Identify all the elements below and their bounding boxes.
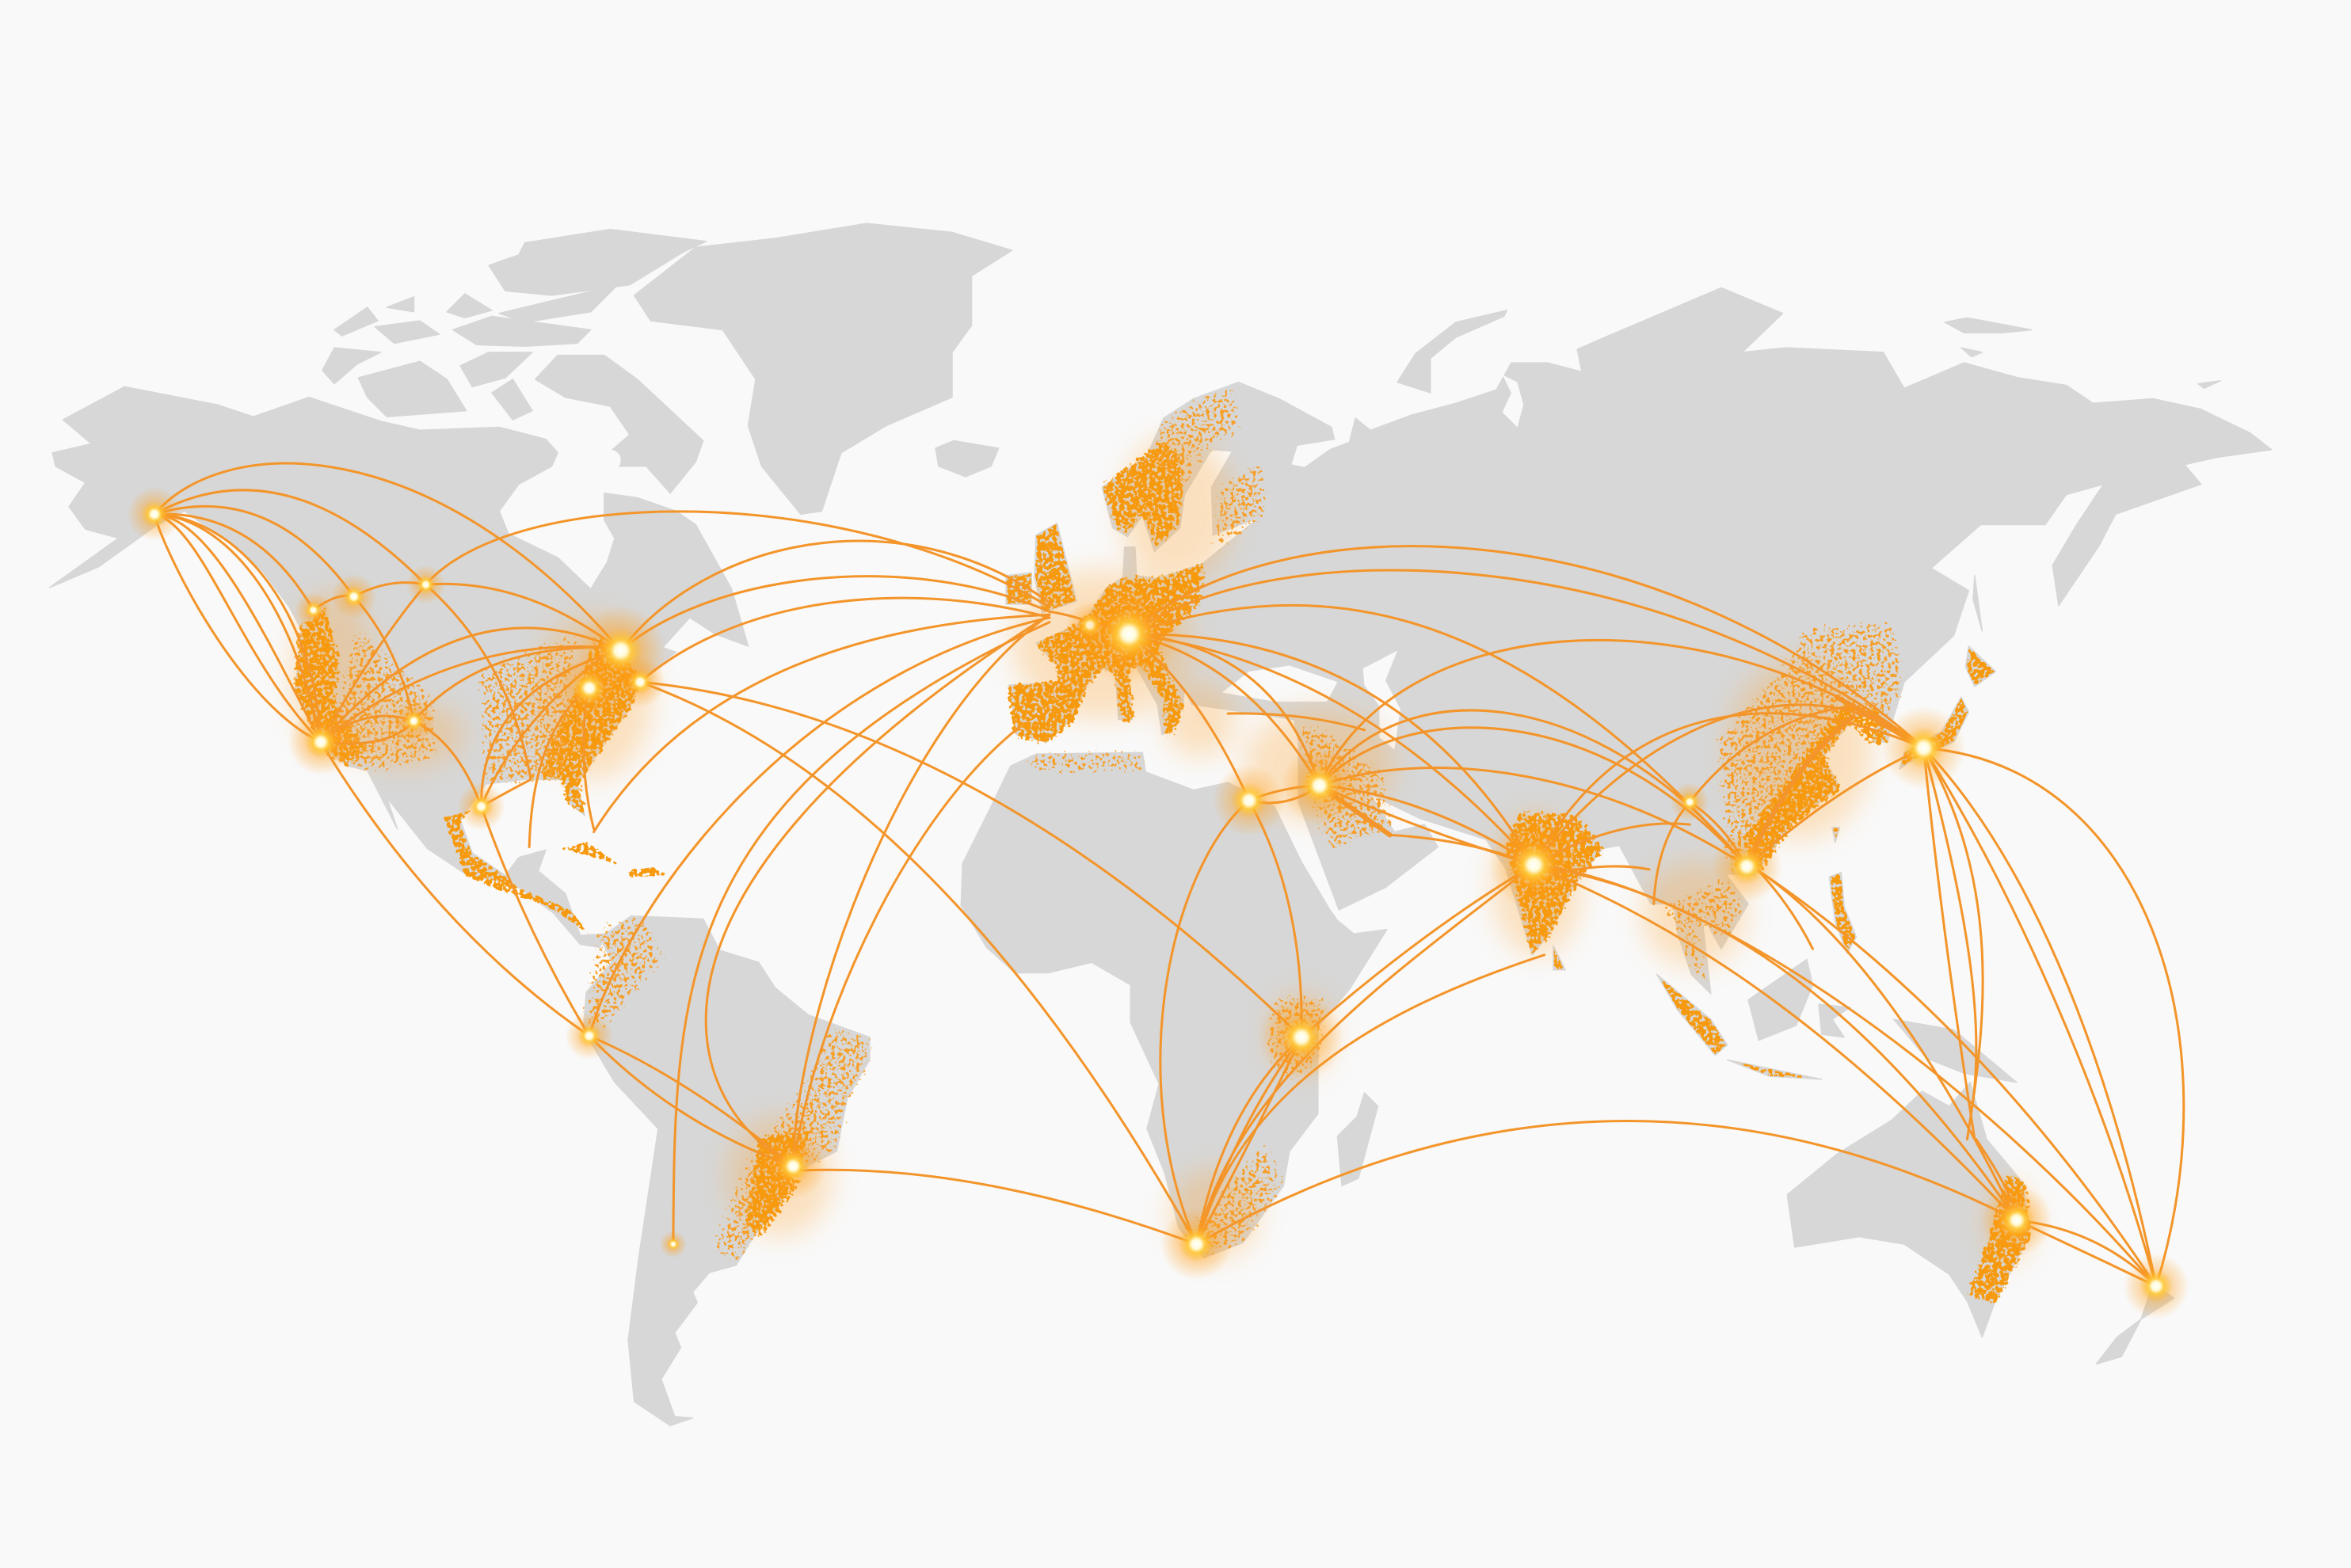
landmass: Madagascar xyxy=(1337,1093,1378,1186)
speckle: US southwest xyxy=(318,615,442,779)
sea: Caspian Sea xyxy=(1363,651,1400,749)
hub: Lima xyxy=(566,1012,613,1060)
landmass: Sri Lanka and Taiwan xyxy=(1553,828,1840,970)
landmass: Siberian islands xyxy=(1945,318,2220,388)
sea: Black Sea xyxy=(1222,665,1337,702)
hub: Auckland xyxy=(2123,1253,2189,1319)
speckle: Southern Africa xyxy=(1172,1132,1293,1267)
landmass: Arctic islands xyxy=(322,230,707,493)
glowing city hubs xyxy=(128,487,2189,1319)
hub: Dubai xyxy=(1280,747,1358,824)
speckle: southern Scandinavia xyxy=(1099,438,1184,552)
arcs: Europe to Asia routes xyxy=(1129,546,1924,866)
city light speckle clusters xyxy=(291,378,2033,1307)
landmass: Iceland xyxy=(935,441,999,477)
hub: Washington xyxy=(615,657,665,707)
landmass: Eurasia xyxy=(1009,287,2272,994)
landmass: North and Central America xyxy=(49,386,749,947)
landmass: Novaya Zemlya xyxy=(1397,310,1507,393)
landmass: Japan and Sakhalin xyxy=(1899,576,1995,769)
speckle: Japan xyxy=(1899,646,1995,769)
inland seas xyxy=(600,375,1523,749)
landmass: Australia xyxy=(1787,1083,2029,1337)
hub: Chile xyxy=(660,1231,687,1258)
speckle: Sao Paulo xyxy=(742,1127,813,1241)
hub: Vancouver xyxy=(295,592,331,628)
speckle: Indonesia xyxy=(1657,974,1822,1079)
hub: Dallas xyxy=(393,700,435,742)
arcs: thick East Asia corridor xyxy=(1320,697,1924,866)
hub: Cape Town xyxy=(1160,1208,1233,1281)
sea: lake and gulf details xyxy=(600,375,1523,470)
hub: Anchorage xyxy=(128,487,181,541)
speckle: North African coast xyxy=(1004,747,1152,779)
land masses xyxy=(49,223,2272,1425)
speckle: East Africa xyxy=(1259,989,1335,1094)
speckle: central United States xyxy=(472,622,585,794)
arcs: North American routes xyxy=(314,583,621,1036)
arcs: Pacific routes xyxy=(1924,748,2184,1286)
hub: Mexico xyxy=(457,782,505,831)
speckle: Brazil xyxy=(705,1019,877,1274)
hub: Chicago xyxy=(556,655,623,721)
hub: Los Angeles xyxy=(288,709,354,775)
speckle: northern Scandinavia and Baltics xyxy=(1140,378,1275,569)
hub: New York xyxy=(576,606,665,695)
hub: Sydney xyxy=(1980,1184,2052,1256)
hub: Cairo xyxy=(1213,764,1285,836)
hub: Kunming xyxy=(1671,782,1709,821)
speckle: dense Europe xyxy=(1004,559,1207,747)
landmass: Philippines xyxy=(1829,873,1856,953)
route arcs xyxy=(154,463,2184,1286)
hub: Central Europe xyxy=(1078,583,1180,685)
soft orange haze around hubs xyxy=(291,435,2033,1264)
hub: Bangkok xyxy=(1711,831,1783,903)
landmass: Britain and Ireland xyxy=(1006,523,1076,613)
landmass: Greenland xyxy=(634,223,1012,514)
speckle: Mexico xyxy=(442,809,593,937)
landmass: Borneo xyxy=(1748,959,1812,1041)
speckle: East China xyxy=(1709,615,1911,881)
arcs: Alaska routes xyxy=(154,463,621,742)
landmass: Africa xyxy=(961,752,1387,1258)
speckle: Britain and Ireland xyxy=(1006,523,1076,613)
speckle: Sri Lanka xyxy=(1553,946,1565,970)
hub: Nairobi xyxy=(1259,995,1343,1079)
speckle: China coast xyxy=(1739,697,1892,881)
speckle: Southeast Asia xyxy=(1646,870,1755,1001)
arcs: Middle East and Asia routes xyxy=(1228,640,2156,1286)
speckle: India xyxy=(1503,809,1607,959)
speckle: eastern United States xyxy=(537,630,645,819)
hub: Boise xyxy=(331,574,376,619)
landmass: Sulawesi and New Guinea xyxy=(1819,1004,2017,1083)
arcs: transatlantic routes xyxy=(426,512,1301,1244)
landmass: Sumatra and Java xyxy=(1657,974,1822,1079)
hub: Calgary xyxy=(406,565,445,604)
speckle: Philippines xyxy=(1829,828,1856,953)
hub: Tokyo xyxy=(1882,706,1966,790)
hub: Mumbai xyxy=(1489,820,1579,910)
arcs: South America and Africa routes xyxy=(589,801,2017,1244)
speckle: East Australia xyxy=(1964,1169,2033,1307)
hub: Paris xyxy=(1066,601,1114,649)
landmass: New Zealand xyxy=(2096,1283,2174,1364)
speckle: Middle East xyxy=(1237,720,1402,862)
speckle: Colombia and Peru xyxy=(577,908,672,1034)
landmass: South America xyxy=(583,916,870,1425)
speckle: US west coast xyxy=(291,603,372,771)
speckle: Caribbean xyxy=(558,841,672,878)
hub: Sao Paulo xyxy=(760,1133,826,1199)
